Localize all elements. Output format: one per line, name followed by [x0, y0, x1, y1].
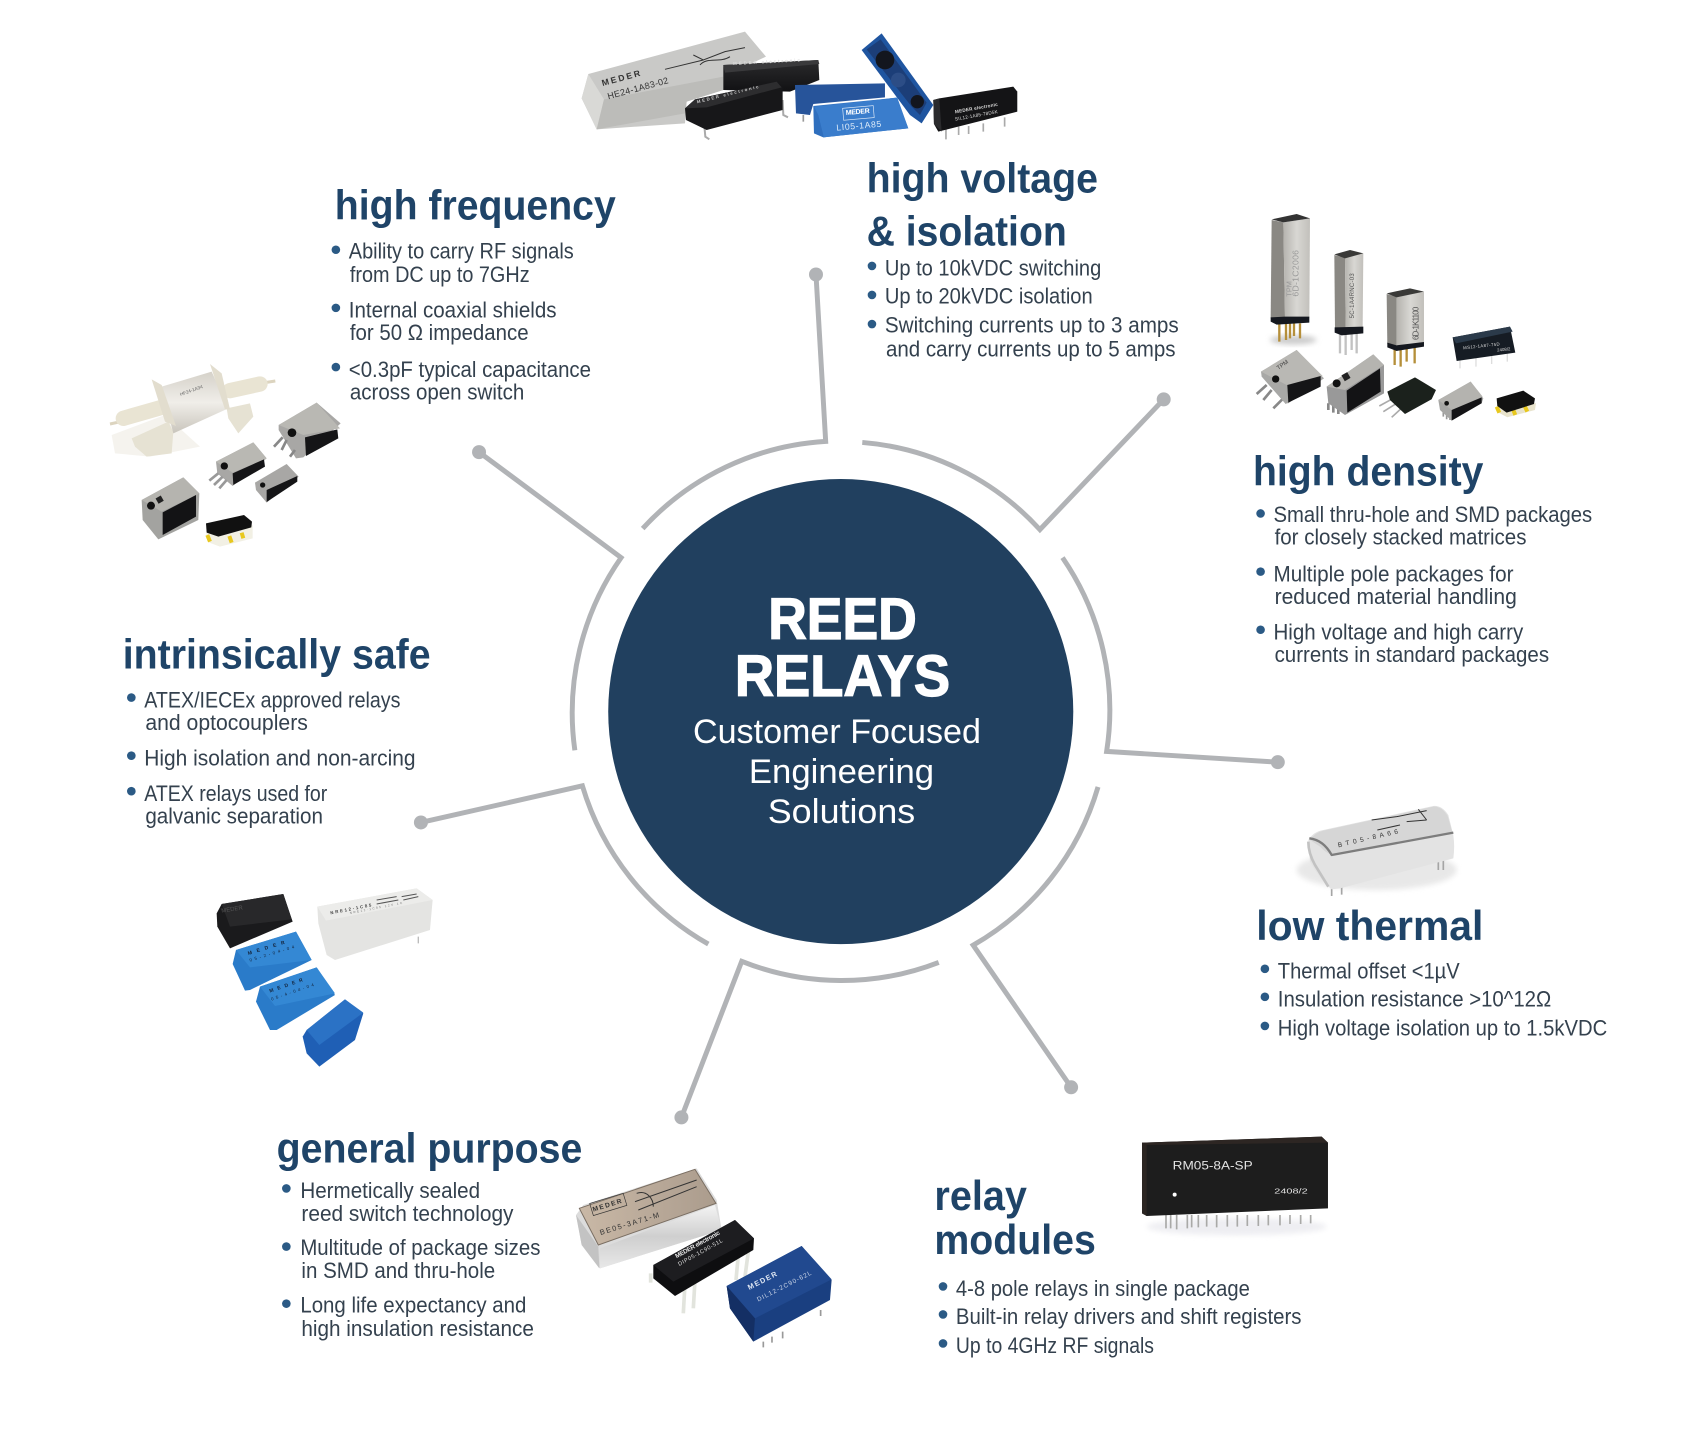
panel: high voltage and isolation: and carry currents up to 5 amps	[886, 336, 1176, 361]
photo: intrinsically safe relays: 05-4-04-04	[270, 982, 315, 1002]
panel: general purpose: high insulation resistance	[301, 1316, 534, 1341]
photo: high density relays: 5C-1A4RNC-03	[1350, 273, 1356, 318]
centre title	[693, 587, 981, 831]
photo: high frequency relays	[110, 364, 341, 547]
panel: general purpose: Hermetically sealed	[300, 1178, 480, 1203]
photo: high voltage relays: HE24-1A83-02	[606, 75, 669, 101]
panel: general purpose	[277, 1125, 582, 1341]
panel: relay modules: relay	[934, 1172, 1028, 1219]
photo: high voltage relays: LI05-1A85	[836, 119, 882, 133]
panel: high voltage and isolation: & isolation	[867, 207, 1067, 254]
centre title: Engineering	[749, 753, 934, 791]
panel: high density: reduced material handling	[1275, 584, 1517, 609]
panel: intrinsically safe: High isolation and non-arcing	[144, 745, 416, 770]
segment: high voltage connector	[643, 268, 826, 529]
photo: intrinsically safe relays	[217, 888, 433, 1067]
panel: high density: high density	[1253, 448, 1484, 495]
photo: high density relays: TPM	[1285, 281, 1294, 297]
segment: general purpose connector	[674, 961, 939, 1124]
photo: relay module: RM05-8A-SP	[1173, 1158, 1253, 1172]
photo: high density relays: TPM	[1276, 359, 1290, 372]
panel: intrinsically safe: ATEX/IECEx approved relays	[144, 687, 400, 712]
panel: low thermal: low thermal	[1256, 902, 1483, 949]
photo: general purpose relays: DIL12-2C90-62L	[756, 1270, 813, 1303]
panel: high density: High voltage and high carry	[1273, 619, 1524, 644]
segment: low thermal connector	[1063, 558, 1285, 769]
panel: high frequency: <0.3pF typical capacitance	[349, 357, 591, 382]
panel: high voltage and isolation: Up to 20kVDC isolation	[885, 284, 1093, 309]
photo: general purpose relays: DIP05-1C90-51L	[677, 1238, 724, 1268]
segment: high frequency connector	[472, 445, 621, 750]
photo: general purpose relays: MEDER	[592, 1198, 623, 1214]
segment: relay modules connector	[973, 787, 1098, 1094]
panel: intrinsically safe: ATEX relays used for	[144, 781, 328, 806]
panel: high voltage and isolation: Up to 10kVDC switching	[885, 256, 1101, 281]
photo: high voltage relays: MEDER	[846, 108, 870, 117]
centre title: Customer Focused	[693, 713, 981, 751]
photo: high density relays: 2408/2	[1497, 346, 1511, 353]
panel: intrinsically safe: galvanic separation	[145, 804, 323, 829]
panel: intrinsically safe: intrinsically safe	[123, 631, 431, 678]
photo: high voltage relays	[582, 32, 1017, 139]
segment: intrinsically safe connector	[414, 786, 708, 944]
photo: high voltage relays: MEDER electronic	[955, 102, 999, 114]
panel: high density: for closely stacked matrices	[1275, 525, 1526, 550]
photo: intrinsically safe relays: NRE12-1C85 12V 1C	[349, 901, 403, 915]
panel: high voltage and isolation: high voltage	[867, 155, 1098, 202]
panel: high frequency	[332, 182, 616, 404]
centre title: REED	[768, 587, 917, 652]
panel: low thermal: Thermal offset <1µV	[1278, 959, 1460, 984]
photo: intrinsically safe relays: MEDER	[221, 905, 244, 915]
photo: relay module: 2408/2	[1274, 1186, 1308, 1195]
panel: high frequency: across open switch	[350, 379, 524, 404]
panel: high density: Multiple pole packages for	[1273, 561, 1514, 586]
panel: intrinsically safe	[123, 631, 431, 829]
panel: general purpose: in SMD and thru-hole	[301, 1258, 495, 1283]
panel: high density: currents in standard packages	[1275, 642, 1549, 667]
panel: low thermal: Insulation resistance >10^12Ω	[1278, 987, 1551, 1012]
photo: high density relays: MS12-1A87-75D	[1463, 342, 1500, 350]
panel: general purpose: Multitude of package sizes	[300, 1235, 540, 1260]
centre title: RELAYS	[735, 644, 950, 709]
photo: intrinsically safe relays: MEDER	[247, 940, 286, 957]
photo: high density relays: 6D-1K1100	[1411, 306, 1420, 340]
panel: high voltage and isolation	[867, 155, 1179, 361]
photo: high voltage relays: SIL12-1A85-78D5K	[955, 109, 999, 122]
centre title: Solutions	[768, 793, 915, 831]
panel: high frequency: Ability to carry RF signals	[349, 238, 574, 263]
panel: high voltage and isolation: Switching currents up to 3 amps	[885, 313, 1179, 338]
photo: high density relays: 6D-1C2006	[1290, 250, 1300, 297]
photo: low thermal relay: BT05-8A66	[1337, 829, 1399, 849]
photo: high frequency relays: HF24-1A34	[179, 384, 204, 397]
panel: high density: Small thru-hole and SMD packages	[1273, 502, 1592, 527]
panel: high frequency: for 50 Ω impedance	[350, 320, 529, 345]
photo: high voltage relays: MEDER electronic	[696, 84, 760, 104]
photo: low thermal relay	[1297, 806, 1457, 896]
panel: relay modules: Built-in relay drivers and shift registers	[956, 1304, 1301, 1329]
panel: relay modules	[934, 1172, 1301, 1358]
panel: general purpose: Long life expectancy and	[300, 1292, 526, 1317]
panel: relay modules: Up to 4GHz RF signals	[956, 1333, 1154, 1358]
photo: high voltage relays: MEDER electronic	[733, 57, 801, 66]
photo: intrinsically safe relays: MEDER	[269, 977, 304, 995]
photo: general purpose relays: MEDER	[746, 1269, 779, 1292]
panel: general purpose: general purpose	[277, 1125, 582, 1172]
segment: high density connector	[862, 392, 1171, 530]
panel: high frequency: high frequency	[335, 182, 616, 229]
panel: relay modules: 4-8 pole relays in single package	[956, 1276, 1250, 1301]
panel: general purpose: reed switch technology	[301, 1201, 514, 1226]
panel: high density	[1253, 448, 1592, 667]
panel: high frequency: from DC up to 7GHz	[350, 262, 530, 287]
panel: low thermal	[1256, 902, 1607, 1041]
photo: general purpose relays: MEDER electronic	[674, 1229, 722, 1260]
photo: relay module	[1142, 1137, 1328, 1235]
panel: relay modules: modules	[934, 1216, 1096, 1263]
photo: high voltage relays: MEDER	[601, 68, 642, 88]
central circle	[608, 479, 1073, 944]
photo: intrinsically safe relays: NRE12-1C85	[330, 902, 372, 915]
photo: general purpose relays: BE05-3A71-M	[599, 1210, 660, 1237]
panel: intrinsically safe: and optocouplers	[145, 710, 308, 735]
diagram text and ring	[123, 155, 1607, 1358]
panel: low thermal: High voltage isolation up to 1.5kVDC	[1278, 1016, 1607, 1041]
photo: general purpose relays	[576, 1168, 832, 1347]
photo: high density relays	[1257, 214, 1536, 421]
photo: intrinsically safe relays: 05-2-04-04	[249, 944, 295, 963]
panel: high frequency: Internal coaxial shields	[349, 298, 557, 323]
